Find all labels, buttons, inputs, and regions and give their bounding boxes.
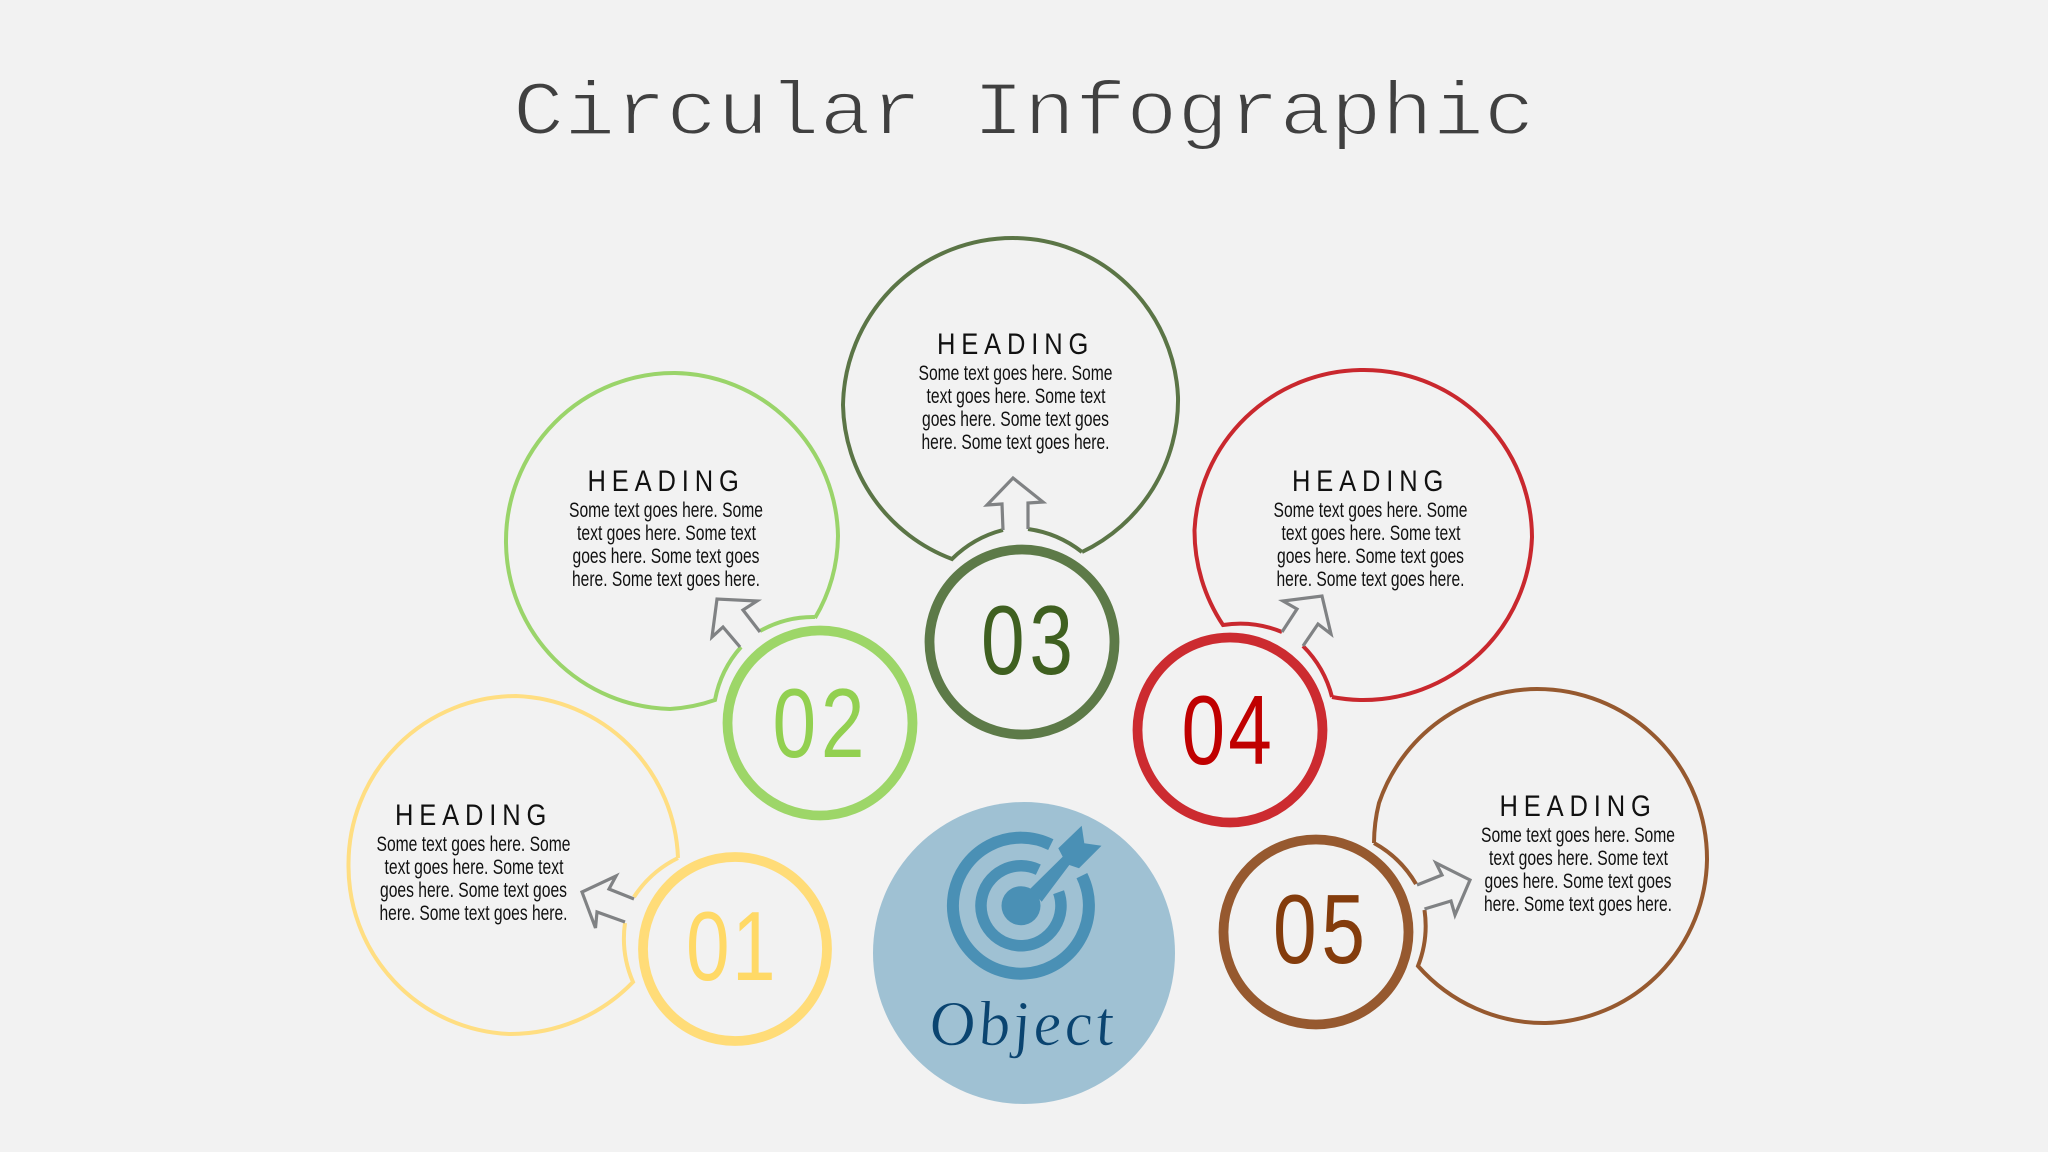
text block: step 04: HEADING — [1292, 464, 1443, 497]
text block: step 03: goes here. Some text goes — [922, 408, 1109, 431]
text block: step 01: Some text goes here. Some — [376, 833, 570, 856]
text block: step 01: goes here. Some text goes — [380, 879, 567, 902]
text block: step 02 — [569, 464, 763, 591]
text block: step 02: Some text goes here. Some — [569, 499, 763, 522]
text block: step 03: Some text goes here. Some — [918, 362, 1112, 385]
arrow: step 05 — [1417, 863, 1470, 915]
text block: step 01: text goes here. Some text — [384, 856, 564, 879]
text block: step 05: here. Some text goes here. — [1484, 893, 1672, 916]
text block: step 03: text goes here. Some text — [926, 385, 1106, 408]
text block: step 04: Some text goes here. Some — [1274, 499, 1468, 522]
ring: step 03 — [930, 550, 1114, 734]
panel: step 02 — [506, 373, 912, 816]
text block: step 04: text goes here. Some text — [1282, 522, 1461, 545]
number: 01: 01 — [686, 892, 776, 1001]
number: 04: 04 — [1182, 676, 1272, 785]
text block: step 01: HEADING — [395, 798, 546, 831]
text block: step 03: HEADING — [937, 327, 1088, 360]
panel: object — [873, 802, 1175, 1104]
panel: step 04 — [1138, 370, 1532, 822]
object label: Object — [925, 988, 1119, 1059]
ring: step 02 — [728, 630, 912, 816]
text block: step 02: goes here. Some text goes — [572, 545, 760, 568]
number: 02: 02 — [772, 669, 865, 778]
text block: step 05: text goes here. Some text — [1489, 847, 1668, 870]
title: Circular Infographic — [513, 71, 1535, 157]
text block: step 02: HEADING — [588, 464, 739, 497]
outline: step 01 bubble — [348, 696, 678, 1034]
ring: step 04 — [1138, 638, 1322, 822]
panel: step 01 — [348, 696, 827, 1041]
text block: step 02: here. Some text goes here. — [572, 568, 760, 591]
text block: step 05 — [1481, 789, 1675, 916]
arrow: step 02 — [712, 599, 760, 647]
text block: step 04: here. Some text goes here. — [1276, 568, 1464, 591]
ring: step 05 — [1224, 840, 1408, 1024]
ring: step 01 — [643, 857, 827, 1041]
object disc — [873, 802, 1175, 1104]
text block: step 01: here. Some text goes here. — [380, 902, 568, 925]
text block: step 03: here. Some text goes here. — [922, 431, 1110, 454]
panel: step 05 — [1224, 689, 1707, 1024]
text block: step 01 — [376, 798, 570, 925]
arrow: step 04 — [1282, 596, 1331, 646]
text block: step 02: text goes here. Some text — [577, 522, 756, 545]
text block: step 05: Some text goes here. Some — [1481, 824, 1675, 847]
text block: step 05: HEADING — [1500, 789, 1651, 822]
arrow: step 03 — [987, 478, 1043, 530]
text block: step 04: goes here. Some text goes — [1277, 545, 1464, 568]
outline: step 05 bubble — [1374, 689, 1707, 1023]
text block: step 04 — [1274, 464, 1468, 591]
outline: step 04 bubble — [1194, 370, 1532, 700]
panel: step 03 — [843, 238, 1178, 734]
number: 03: 03 — [981, 586, 1073, 695]
arrow: step 01 — [582, 876, 634, 928]
text block: step 05: goes here. Some text goes — [1484, 870, 1672, 893]
icon: target with arrow — [953, 826, 1102, 974]
text block: step 03 — [918, 327, 1112, 454]
outline: step 03 bubble — [843, 238, 1178, 559]
outline: step 02 bubble — [506, 373, 838, 709]
number: 05: 05 — [1273, 875, 1365, 984]
